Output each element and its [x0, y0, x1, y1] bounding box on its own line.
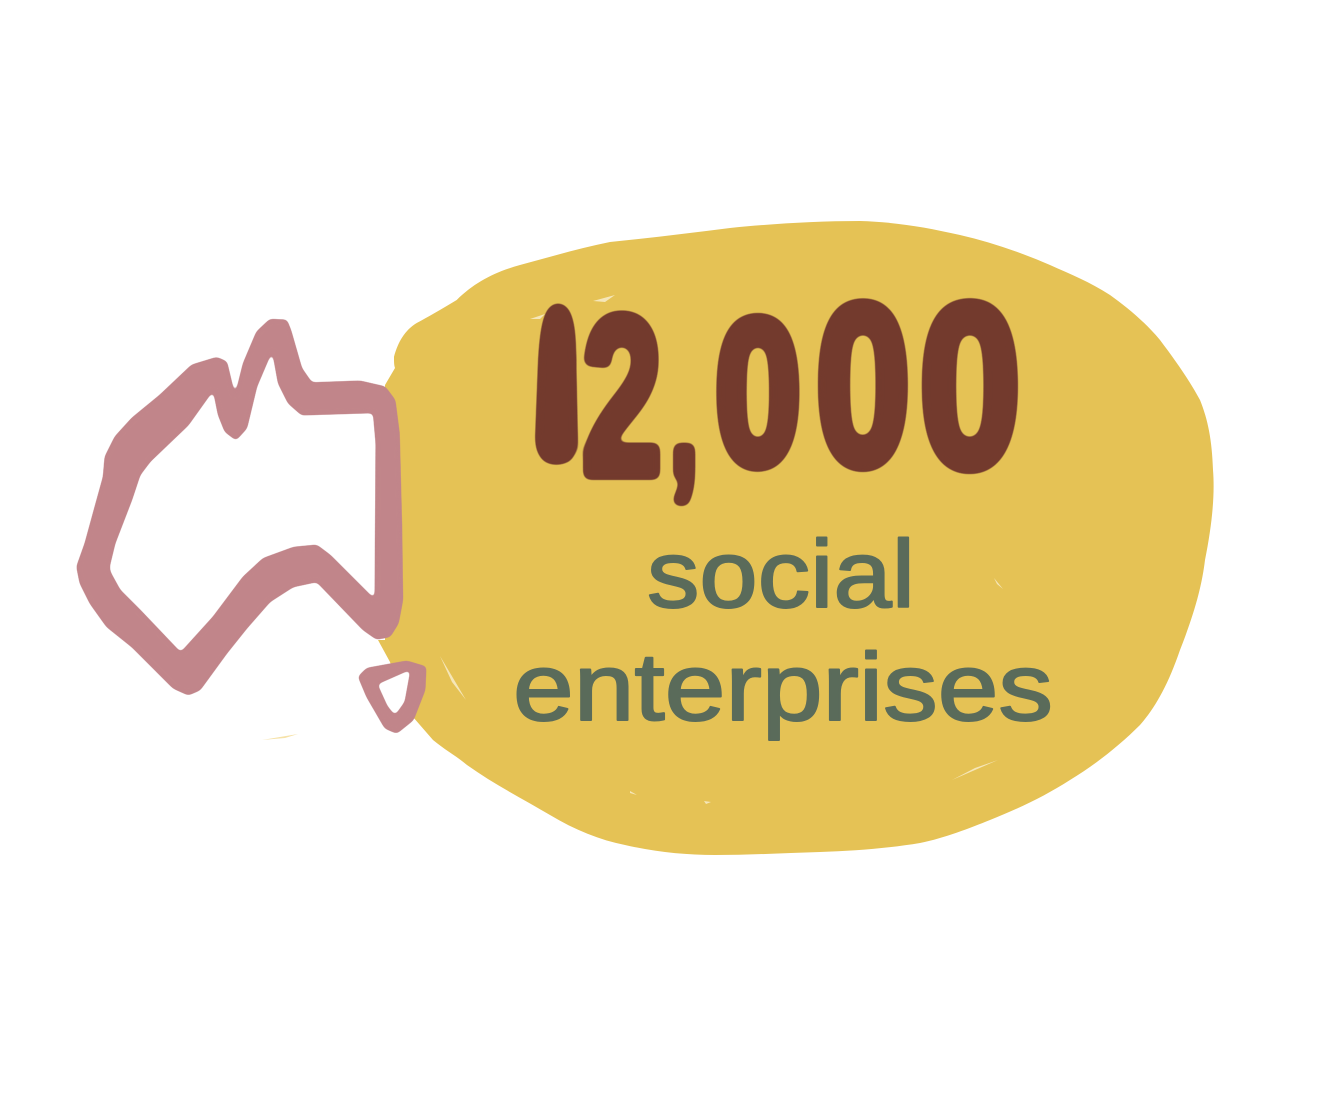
big number 12,000: 1 [540, 271, 572, 500]
mainland outline [77, 319, 403, 695]
label: social enterprises: social [647, 521, 915, 628]
big number 12,000: 2 [582, 270, 662, 523]
big number 12,000: 0 [715, 276, 801, 508]
big number 12,000: 0 [816, 256, 910, 513]
big number 12,000: , [669, 320, 699, 510]
yellow blob background [262, 221, 1214, 855]
label: social enterprises: enterprises [513, 634, 1053, 741]
Tasmania outline [358, 661, 426, 733]
label: social enterprises [513, 521, 1053, 741]
big number 12,000 [535, 256, 1021, 523]
big number 12,000: 0 [919, 257, 1021, 516]
icon: outline map of Australia [77, 319, 426, 733]
